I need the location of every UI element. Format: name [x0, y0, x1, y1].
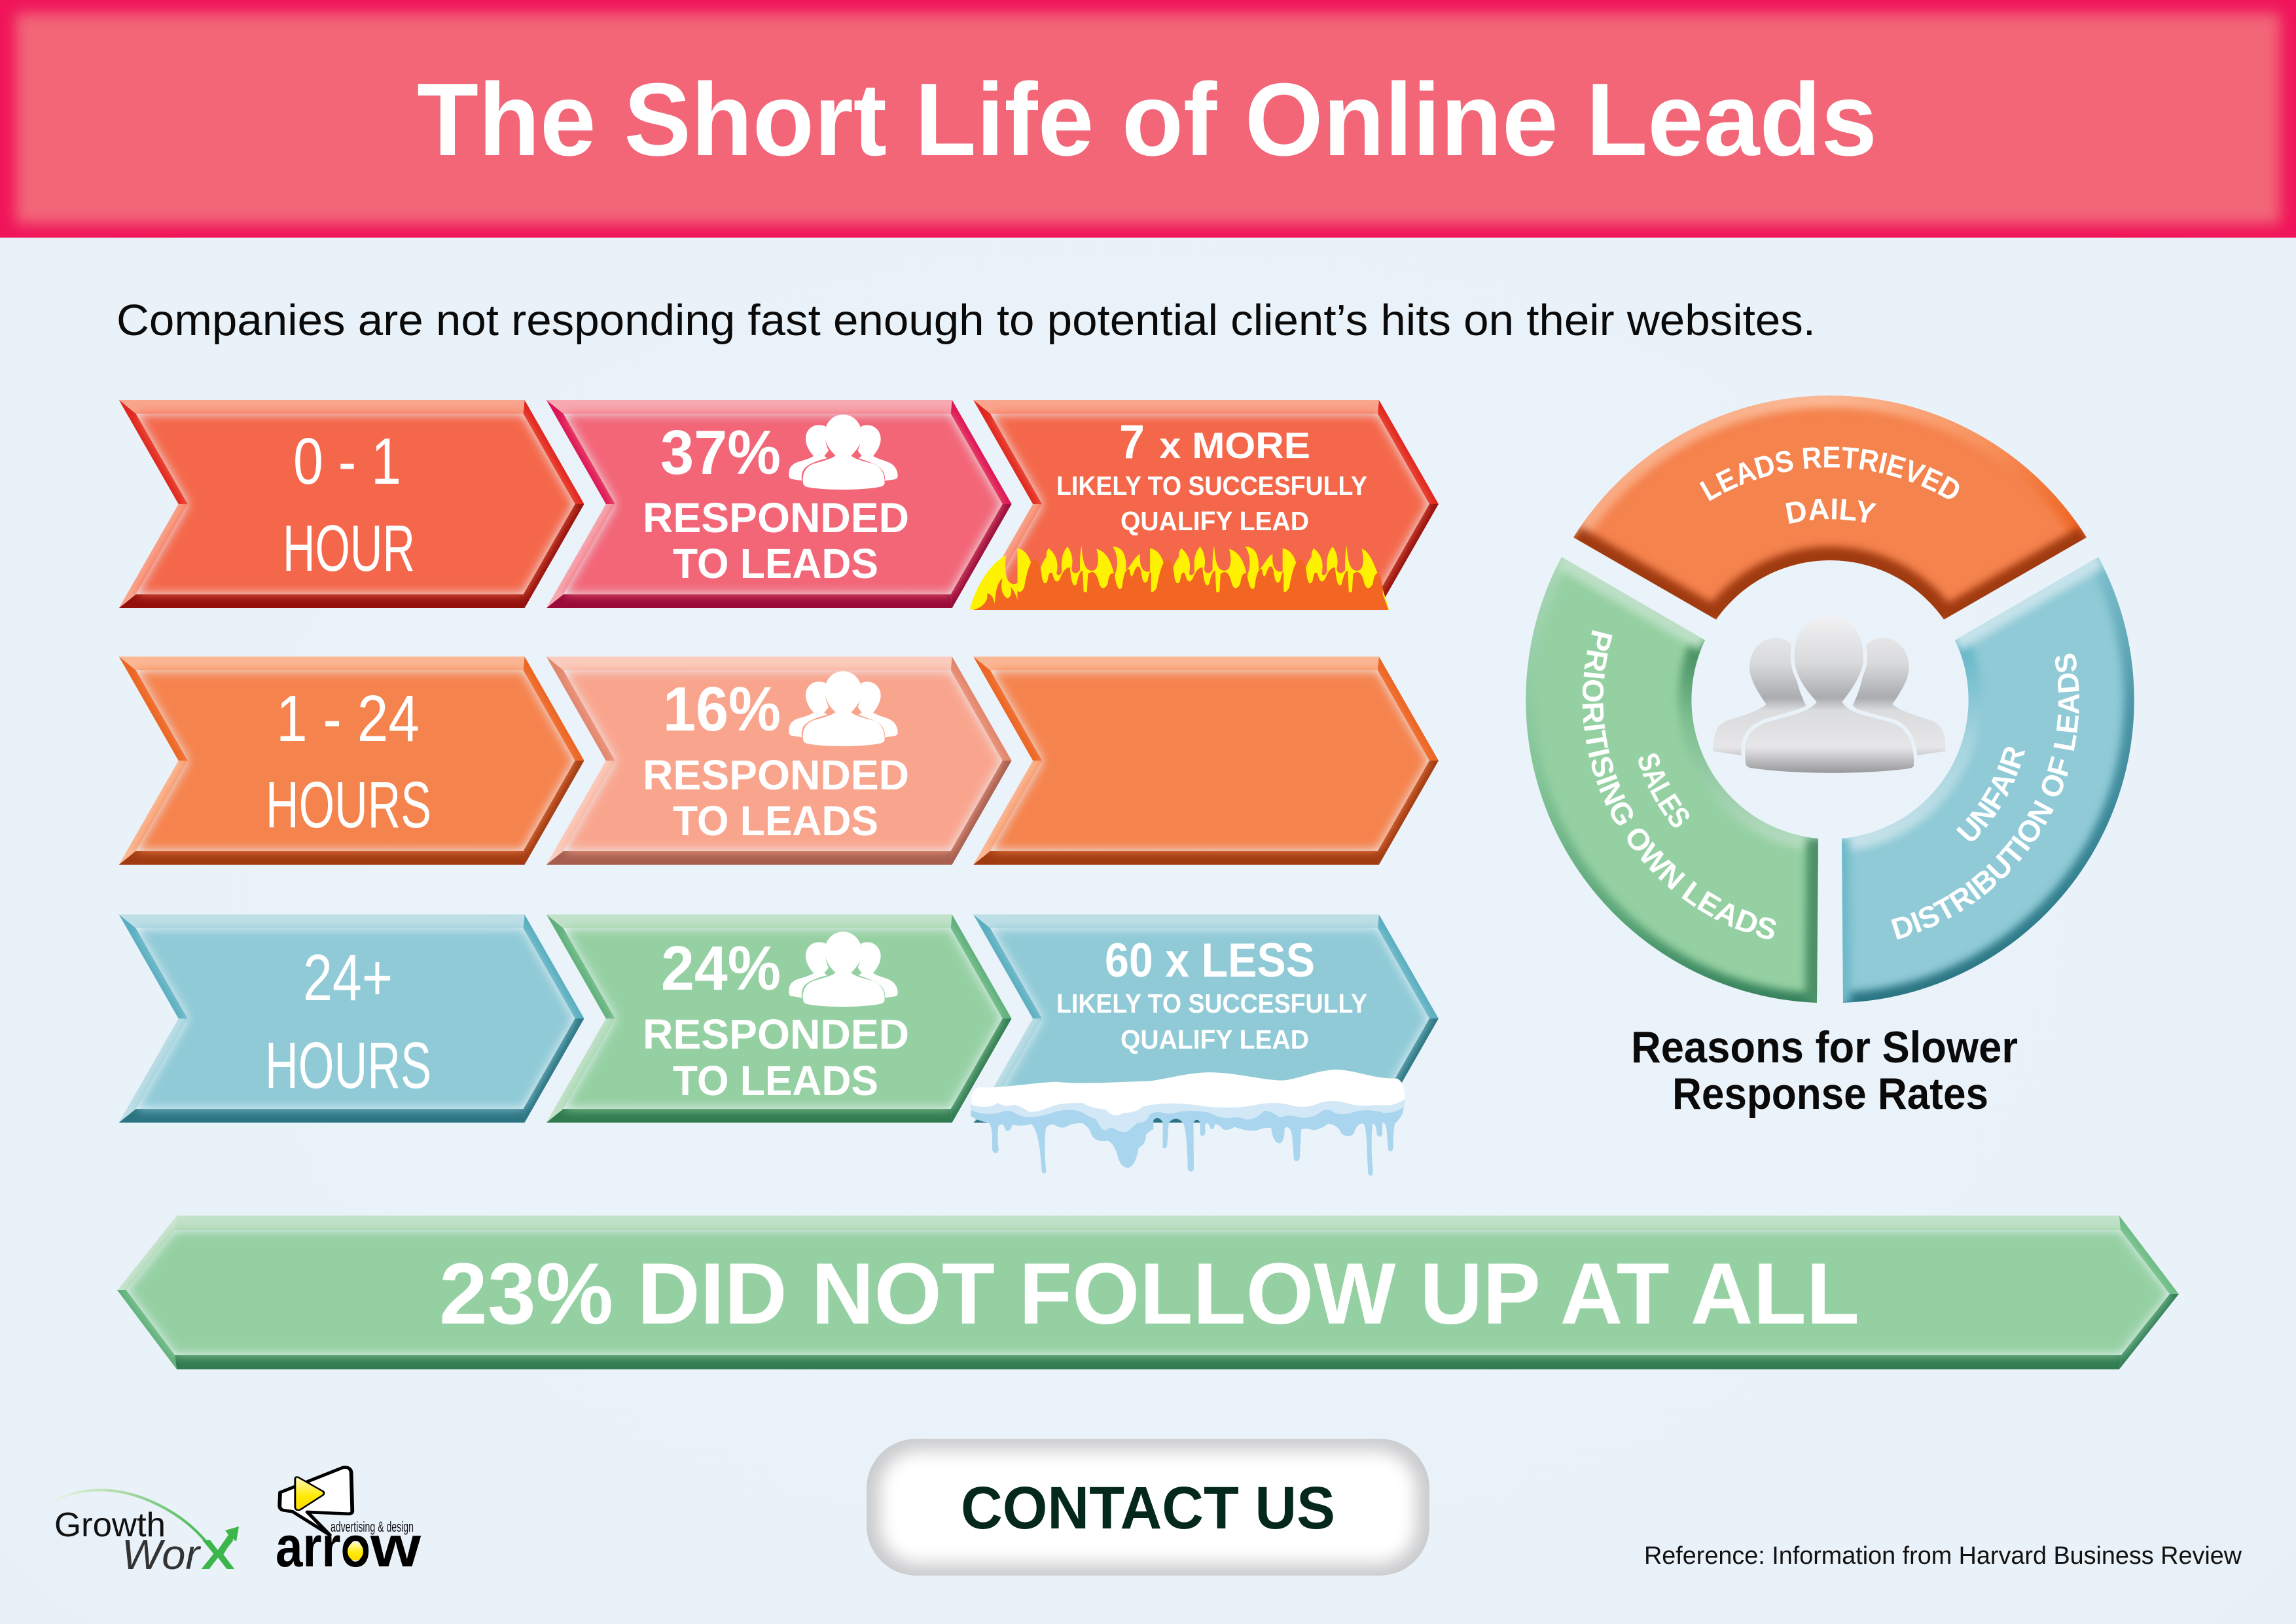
- icon: people: [789, 671, 898, 746]
- percentage: 24%: [661, 933, 781, 1003]
- segment label: DISTRIBUTION OF LEADS: [1891, 653, 2079, 940]
- time unit: HOURS: [265, 1029, 431, 1102]
- outcome text line 2: QUALIFY LEAD: [1121, 1024, 1309, 1055]
- time value: 1 - 24: [276, 682, 420, 755]
- banner arrow: 23% did not follow up: [117, 1216, 2179, 1369]
- chart caption: Reasons for Slower: [1631, 1022, 2018, 1072]
- segment label line 2: SALES: [1638, 753, 1689, 827]
- multiplier: 7: [1119, 416, 1145, 469]
- logo: GrowthWorX: Wor: [122, 1531, 202, 1578]
- logo: arrow advertising & design: arro: [276, 1514, 370, 1579]
- outcome text: LIKELY TO SUCCESFULLY: [1056, 471, 1367, 501]
- segment: sales prioritising own leads: [1526, 557, 1818, 1003]
- icon: snow and icicles: [971, 1070, 1405, 1176]
- logo: GrowthWorX: Growth: [54, 1506, 166, 1544]
- icon: flames: [970, 546, 1389, 610]
- time value: 24+: [303, 941, 393, 1015]
- row 1 time chevron: 0 - 1 hour: [119, 400, 584, 608]
- segment label line 2: UNFAIR: [1956, 747, 2025, 841]
- percentage: 37%: [660, 418, 781, 488]
- icon: central people group: [1713, 615, 1945, 775]
- chart caption: [1631, 1022, 2018, 1119]
- logo: arrow advertising & design: w: [370, 1514, 422, 1579]
- segment label: PRIORITISING OWN LEADS: [1583, 630, 1776, 939]
- outcome text: LIKELY TO SUCCESFULLY: [1056, 988, 1367, 1019]
- row 3 outcome chevron: 60 x less: [971, 914, 1439, 1176]
- row 2 time chevron: 1 - 24 hours: [119, 657, 584, 865]
- button label: CONTACT US: [961, 1475, 1335, 1542]
- logo: arrow advertising & design: advertising & design: [331, 1519, 414, 1535]
- response label line 2: TO LEADS: [673, 540, 878, 587]
- row 3 time chevron: 24+ hours: [119, 914, 584, 1123]
- row 3 response chevron: 24%: [547, 914, 1012, 1123]
- banner text: 23% DID NOT FOLLOW UP AT ALL: [439, 1246, 1859, 1343]
- outcome text line 2: QUALIFY LEAD: [1121, 506, 1309, 536]
- time unit: HOURS: [266, 768, 431, 842]
- title: The Short Life of Online Leads: [417, 62, 1877, 177]
- segment label line 2: DAILY: [1785, 499, 1877, 524]
- percentage: 16%: [663, 674, 781, 744]
- response label line 2: TO LEADS: [673, 1057, 878, 1104]
- icon: people: [789, 414, 898, 490]
- row 1 response chevron: 37%: [547, 400, 1012, 608]
- logo: arrow advertising & design: [276, 1468, 422, 1579]
- intro sentence: Companies are not responding fast enough to potential client’s hits on their websites.: [117, 296, 1816, 345]
- contact button: [867, 1439, 1429, 1576]
- multiplier: x MORE: [1159, 425, 1310, 467]
- time unit: HOUR: [283, 512, 415, 585]
- donut chart: reasons for slower response rates: [1526, 395, 2134, 1003]
- response label: RESPONDED: [643, 494, 909, 541]
- row 2 empty outcome chevron: [973, 657, 1439, 865]
- segment: leads retrieved daily: [1573, 395, 2087, 619]
- logo: GrowthWorX: [54, 1490, 239, 1578]
- chart caption: Response Rates: [1672, 1069, 1988, 1119]
- response label: RESPONDED: [643, 751, 909, 799]
- header banner: [0, 0, 2296, 238]
- response label: RESPONDED: [643, 1011, 909, 1058]
- icon: people: [789, 931, 898, 1007]
- source reference: Reference: Information from Harvard Business Review: [1644, 1542, 2242, 1570]
- logo: GrowthWorX: X: [201, 1531, 235, 1578]
- row 1 outcome chevron: 7 x more: [970, 400, 1439, 610]
- row 2 response chevron: 16%: [547, 657, 1012, 865]
- segment label: LEADS RETRIEVED: [1699, 446, 1960, 501]
- multiplier: 60 x LESS: [1105, 934, 1315, 987]
- multiplier: [1119, 416, 1310, 469]
- time value: 0 - 1: [293, 425, 401, 498]
- segment: unfair distribution of leads: [1842, 557, 2134, 1003]
- response label line 2: TO LEADS: [673, 797, 878, 844]
